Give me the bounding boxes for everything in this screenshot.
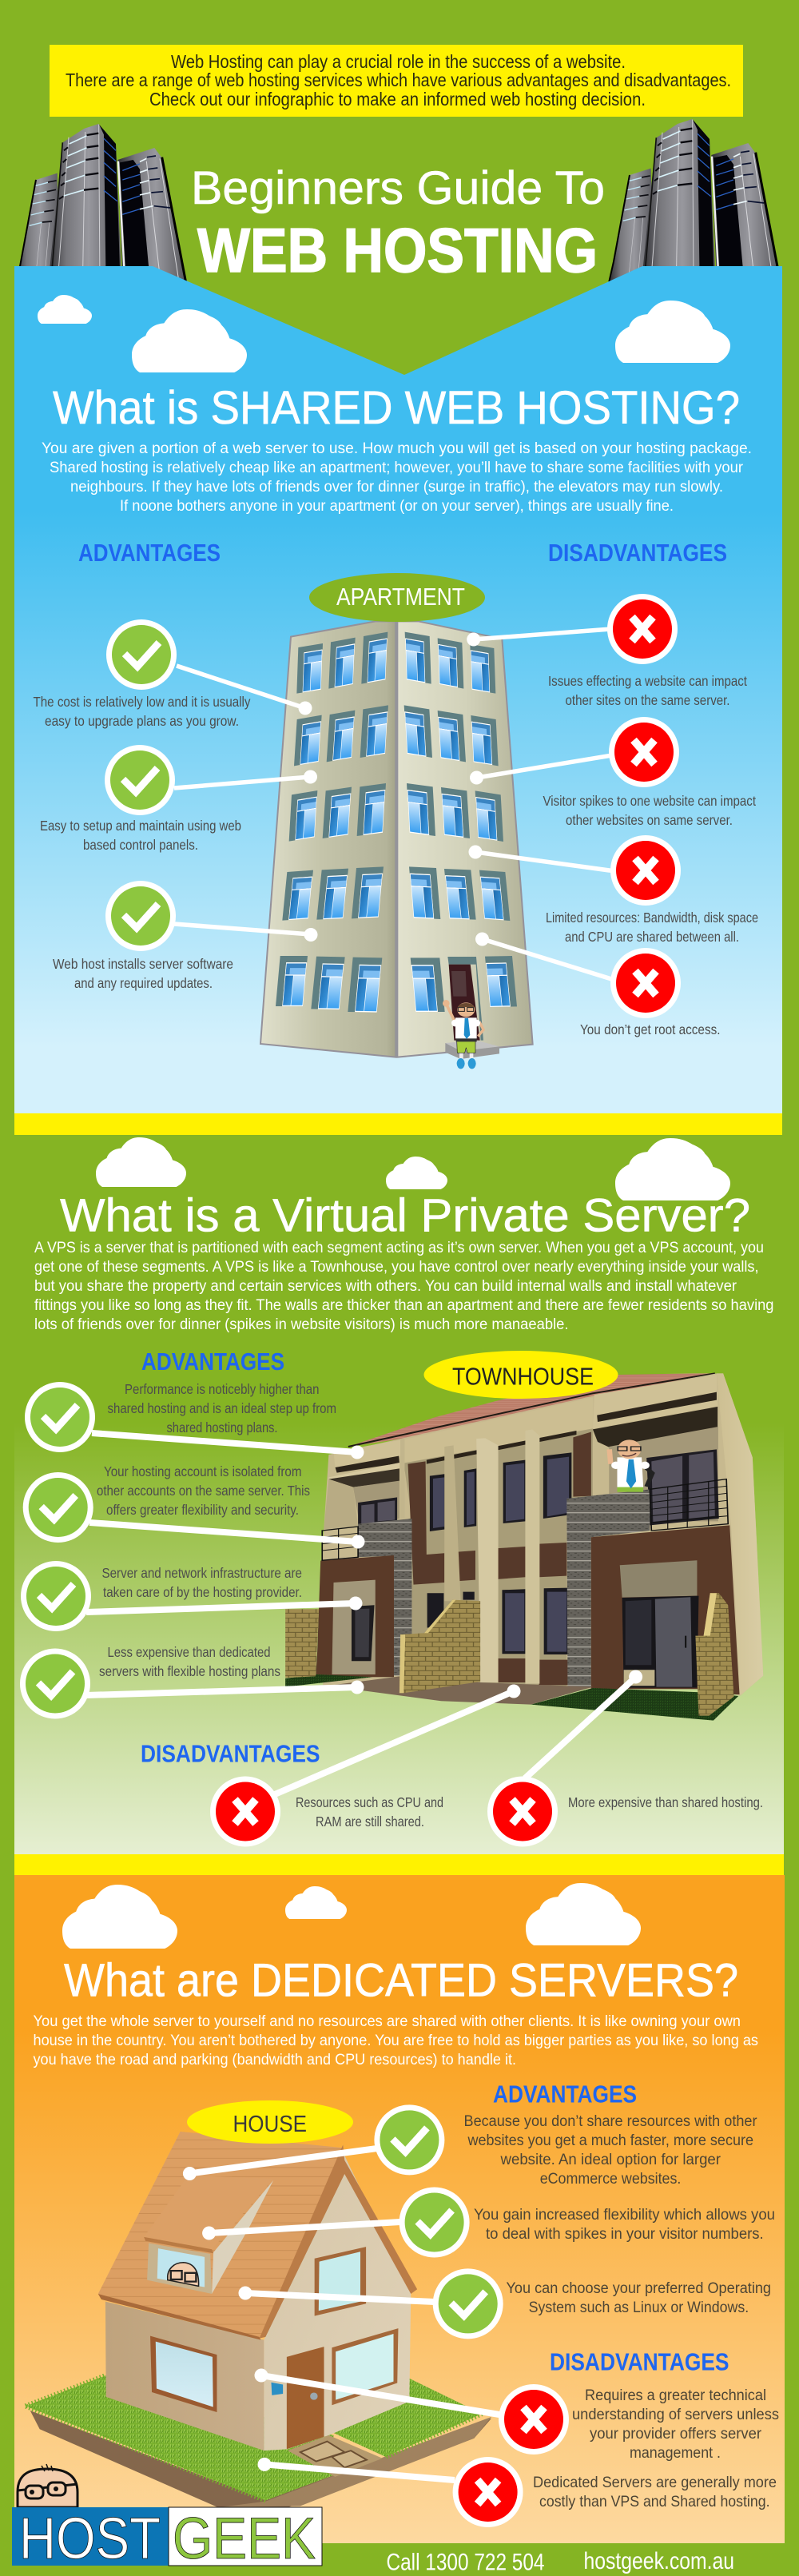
disadvantage 3: and CPU are shared between all. bbox=[565, 929, 739, 945]
intro paragraph: neighbours. If they have lots of friends over for dinner (surge in traffic), the elevators may run slowly. bbox=[70, 479, 723, 496]
advantage 1: websites you get a much faster, more secure bbox=[467, 2132, 753, 2149]
intro text box bbox=[50, 45, 743, 117]
house oval label: HOUSE bbox=[233, 2112, 307, 2137]
intro paragraph: A VPS is a server that is partitioned with each segment acting as it’s own server. When you get a VPS account, you bbox=[34, 1240, 764, 1256]
townhouse oval label: TOWNHOUSE bbox=[452, 1362, 594, 1391]
advantage 2 bbox=[23, 1463, 364, 1549]
panel: dedicated servers bbox=[14, 1875, 785, 2543]
disadvantages heading: DISADVANTAGES bbox=[548, 539, 727, 567]
yellow divider bbox=[14, 1113, 782, 1135]
disadvantage 1: RAM are still shared. bbox=[316, 1814, 424, 1829]
heading: What are DEDICATED SERVERS? bbox=[64, 1955, 738, 2006]
intro text box: Web Hosting can play a crucial role in the success of a website. bbox=[171, 51, 626, 72]
clouds bbox=[38, 295, 730, 372]
disadvantages heading: DISADVANTAGES bbox=[141, 1739, 320, 1768]
advantage 3: System such as Linux or Windows. bbox=[529, 2299, 749, 2316]
logo: hostgeek bbox=[12, 2506, 322, 2571]
house illustration bbox=[26, 2132, 491, 2507]
townhouse oval label bbox=[423, 1351, 618, 1399]
yellow divider bbox=[14, 1854, 784, 1875]
disadvantage 2 bbox=[470, 717, 756, 828]
advantage 3: You can choose your preferred Operating bbox=[507, 2280, 771, 2297]
advantage 1 bbox=[183, 2104, 757, 2188]
disadvantage 1: Requires a greater technical bbox=[585, 2387, 766, 2404]
intro paragraph: You are given a portion of a web server to use. How much you will get is based on your hosting package. bbox=[42, 440, 752, 457]
advantage 1 bbox=[34, 619, 312, 729]
advantage 3 bbox=[53, 881, 318, 991]
advantage 2: Your hosting account is isolated from bbox=[104, 1463, 302, 1479]
intro paragraph: lots of friends over for dinner (spikes in website visitors) is much more manaeable. bbox=[34, 1316, 569, 1333]
icon: man waving at the door bbox=[443, 1000, 499, 1069]
footer phone number: Call 1300 722 504 bbox=[387, 2550, 545, 2575]
intro paragraph: fittings you like so long as they fit. The walls are thicker than an apartment and there are fewer residents so having bbox=[34, 1297, 773, 1314]
advantage 2: to deal with spikes in your visitor numbers. bbox=[486, 2226, 764, 2243]
apartment oval label: APARTMENT bbox=[336, 583, 465, 611]
advantage 2: based control panels. bbox=[83, 837, 198, 853]
advantage 1: The cost is relatively low and it is usually bbox=[34, 694, 251, 710]
advantage 3: Server and network infrastructure are bbox=[102, 1565, 302, 1581]
advantage 2: other accounts on the same server. This bbox=[97, 1483, 310, 1499]
clouds bbox=[96, 1137, 730, 1200]
advantage 4: Less expensive than dedicated bbox=[107, 1644, 270, 1660]
advantage 1: Because you don’t share resources with other bbox=[463, 2113, 757, 2130]
advantage 2: Easy to setup and maintain using web bbox=[40, 818, 241, 834]
apartment oval label bbox=[309, 573, 485, 622]
advantage 2 bbox=[202, 2187, 775, 2257]
disadvantage 3: Limited resources: Bandwidth, disk space bbox=[546, 910, 758, 926]
advantage 2: offers greater flexibility and security. bbox=[106, 1502, 299, 1518]
clouds bbox=[62, 1883, 641, 1949]
panel background bbox=[14, 1875, 785, 2543]
heading: What is SHARED WEB HOSTING? bbox=[53, 382, 740, 434]
heading: What is a Virtual Private Server? bbox=[60, 1189, 750, 1242]
disadvantages heading: DISADVANTAGES bbox=[550, 2348, 729, 2375]
intro text box: Check out our infographic to make an informed web hosting decision. bbox=[149, 89, 646, 109]
icon: left server towers bbox=[15, 124, 187, 286]
advantages heading: ADVANTAGES bbox=[78, 539, 221, 567]
disadvantage 1: your provider offers server bbox=[590, 2426, 762, 2443]
intro paragraph: Shared hosting is relatively cheap like an apartment; however, you’ll have to share some facilities with your bbox=[50, 460, 744, 476]
disadvantage 1: Issues effecting a website can impact bbox=[548, 673, 747, 689]
disadvantage 4: You don’t get root access. bbox=[580, 1021, 721, 1037]
disadvantage 1: understanding of servers unless bbox=[572, 2407, 779, 2423]
footer website: hostgeek.com.au bbox=[583, 2548, 734, 2574]
apartment building bbox=[260, 621, 533, 1057]
intro paragraph: you have the road and parking (bandwidth and CPU resources) to handle it. bbox=[34, 2052, 516, 2068]
disadvantage 1 bbox=[254, 2369, 779, 2462]
advantage 1: shared hosting and is an ideal step up from bbox=[107, 1400, 336, 1416]
intro paragraph: If noone bothers anyone in your apartment (or on your server), things are usually fine. bbox=[120, 498, 674, 515]
disadvantage 2: Visitor spikes to one website can impact bbox=[543, 793, 756, 809]
intro paragraph bbox=[34, 2013, 758, 2068]
advantage 3: Web host installs server software bbox=[53, 956, 233, 972]
disadvantage 3 bbox=[468, 835, 758, 945]
advantages heading: ADVANTAGES bbox=[493, 2080, 637, 2108]
disadvantage 2: costly than VPS and Shared hosting. bbox=[539, 2494, 770, 2510]
panel background bbox=[14, 1135, 784, 1854]
advantages heading: ADVANTAGES bbox=[141, 1348, 284, 1376]
disadvantage 1: Resources such as CPU and bbox=[296, 1794, 443, 1810]
advantage 4: servers with flexible hosting plans bbox=[99, 1663, 280, 1679]
advantage 3: taken care of by the hosting provider. bbox=[103, 1584, 302, 1600]
logo: geek face bbox=[18, 2464, 78, 2507]
advantage 1: eCommerce websites. bbox=[540, 2171, 681, 2188]
icon: right server towers bbox=[609, 119, 781, 281]
advantage 2 bbox=[40, 745, 317, 853]
panel: virtual private server bbox=[14, 1135, 784, 1854]
disadvantage 2: Dedicated Servers are generally more bbox=[533, 2474, 777, 2491]
advantage 1: website. An ideal option for larger bbox=[500, 2152, 721, 2168]
main title: WEB HOSTING bbox=[197, 215, 598, 285]
intro paragraph: but you share the property and certain services with others. You can build internal walls and install whatever bbox=[34, 1278, 737, 1295]
advantage 1 bbox=[25, 1381, 364, 1459]
disadvantage 1: other sites on the same server. bbox=[566, 692, 730, 708]
disadvantage 2: More expensive than shared hosting. bbox=[568, 1794, 763, 1810]
main title: Beginners Guide To bbox=[191, 162, 605, 214]
advantage 3 bbox=[21, 1561, 363, 1631]
disadvantage 1: management . bbox=[630, 2445, 721, 2462]
advantage 1: Performance is noticebly higher than bbox=[125, 1381, 320, 1397]
advantage 4 bbox=[20, 1644, 364, 1718]
logo: hostgeek: HOST bbox=[19, 2506, 161, 2571]
panel background bbox=[14, 266, 782, 1113]
disadvantage 2: other websites on same server. bbox=[566, 812, 733, 828]
townhouse building bbox=[285, 1373, 763, 1721]
disadvantage 1 bbox=[467, 594, 747, 708]
main title bbox=[191, 162, 605, 285]
advantage 3: and any required updates. bbox=[74, 975, 213, 991]
disadvantage 2 bbox=[487, 1670, 763, 1846]
advantage 1: easy to upgrade plans as you grow. bbox=[45, 713, 239, 729]
advantage 2: You gain increased flexibility which allows you bbox=[474, 2207, 775, 2224]
intro paragraph: You get the whole server to yourself and no resources are shared with other clients. It is like owning your own bbox=[34, 2013, 741, 2030]
intro paragraph bbox=[34, 1240, 773, 1333]
disadvantage 1 bbox=[210, 1685, 521, 1846]
intro paragraph: house in the country. You aren’t bothered by anyone. You are free to hold as bigger parties as you like, so long as bbox=[34, 2033, 758, 2049]
logo: hostgeek: GEEK bbox=[173, 2506, 316, 2571]
disadvantage 2 bbox=[257, 2457, 777, 2527]
intro paragraph bbox=[42, 440, 752, 515]
intro paragraph: get one of these segments. A VPS is like a Townhouse, you have control over nearly everything inside your walls, bbox=[34, 1259, 759, 1276]
house oval label bbox=[187, 2100, 353, 2144]
panel: shared web hosting bbox=[14, 266, 782, 1113]
advantage 1: shared hosting plans. bbox=[166, 1419, 278, 1435]
disadvantage 4 bbox=[475, 932, 721, 1037]
advantage 3 bbox=[238, 2268, 771, 2339]
